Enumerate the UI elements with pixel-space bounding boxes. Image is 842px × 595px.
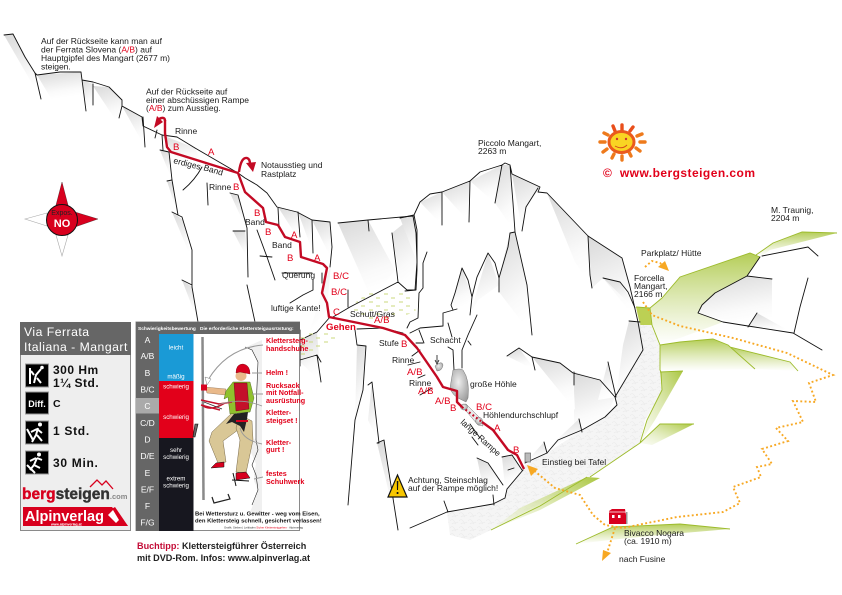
icon: exposure compass: Expos. (51, 210, 73, 217)
icon: climber (26, 364, 48, 387)
difficulty scale column: D (144, 434, 151, 444)
credit line: Grafik: Sieben | Leitfaden Sicher Klettersteiggehen · Alpinverlag (224, 526, 303, 530)
icon: info board (525, 453, 530, 462)
icon: warning triangle (388, 475, 407, 497)
map labels: Forcella (634, 273, 665, 283)
panel headings: Die erforderliche Klettersteigausrüstung: (200, 326, 294, 332)
difficulty scale column: D/E (140, 451, 155, 461)
book tip: Buchtipp: (137, 541, 182, 551)
hiking trails (527, 261, 833, 561)
difficulty colour bands: mäßig (167, 374, 185, 380)
map labels: 2204 m (771, 213, 799, 223)
difficulty colour bands: schwierig (163, 384, 189, 390)
equipment labels: Schuhwerk (266, 477, 304, 486)
icon: exposure compass (25, 182, 98, 256)
difficulty colour bands: leicht (169, 344, 183, 352)
map labels: Höhlendurchschlupf (483, 410, 559, 420)
map labels: Mangart, (634, 281, 668, 291)
difficulty grades: B/C (333, 271, 349, 282)
map labels: erdiges (173, 155, 202, 172)
logo: Alpinverlag: www.alpinverlag.at (50, 522, 82, 526)
map labels: lange Rampe (459, 417, 503, 459)
map labels: 2263 m (478, 146, 506, 156)
map labels: Achtung, Steinschlag (408, 475, 488, 485)
difficulty value: C (53, 398, 61, 410)
difficulty scale column: F (145, 501, 150, 511)
difficulty grades: B/C (331, 287, 347, 298)
map labels: luftige Kante! (271, 303, 321, 313)
equipment labels: Klettersteig- (266, 336, 309, 345)
difficulty grades: A/B (418, 386, 433, 397)
difficulty colour bands: sehr (170, 447, 182, 454)
difficulty scale column: E/F (141, 484, 154, 494)
note: exit ramp: einer abschüssigen Rampe (146, 95, 249, 105)
book tip: mit DVD-Rom. Infos: www.alpinverlag.at (137, 553, 310, 563)
route title: Via Ferrata (24, 325, 90, 339)
rock shading (4, 34, 793, 530)
icon: difficulty: Diff. (28, 399, 46, 409)
difficulty scale column: C/D (140, 418, 155, 428)
map labels (173, 126, 814, 564)
difficulty grades: B (287, 253, 293, 264)
note: exit ramp: (A/B) zum Ausstieg. (146, 103, 221, 113)
icon: sun logo (600, 125, 645, 160)
difficulty scale column: A (145, 335, 151, 345)
map labels: Einstieg bei Tafel (542, 457, 606, 467)
difficulty grades: B (513, 445, 519, 456)
arrow: Schacht pointer (435, 355, 439, 364)
difficulty grades: B (265, 227, 271, 238)
icon: approach (26, 421, 48, 444)
map labels: nach Fusine (619, 554, 666, 564)
equipment labels (266, 336, 309, 486)
scree slope (447, 322, 662, 540)
difficulty colour bands (159, 334, 194, 531)
map labels: Stufe (379, 338, 399, 348)
equipment labels: Helm ! (266, 368, 288, 377)
caves (435, 363, 483, 426)
map labels: (ca. 1910 m) (624, 536, 672, 546)
difficulty grades: B (254, 208, 260, 219)
map labels: Rinne (392, 355, 414, 365)
difficulty scale column: F/G (140, 518, 155, 528)
ascent stats: 1¼ Std. (53, 376, 99, 390)
map labels: Rinne (409, 378, 431, 388)
map labels: Piccolo Mangart, (478, 138, 541, 148)
difficulty grades (173, 142, 519, 456)
icon: difficulty (26, 392, 48, 414)
map labels: Rinne (209, 182, 231, 192)
panel: route summary (20, 322, 131, 530)
descent time: 30 Min. (53, 456, 99, 470)
map labels: M. Traunig, (771, 205, 814, 215)
difficulty grades: A/B (407, 367, 422, 378)
difficulty grades: A (291, 230, 298, 241)
difficulty grades: C (333, 307, 340, 318)
equipment labels: steigset ! (266, 416, 298, 425)
map labels: 2166 m (634, 289, 662, 299)
panel: difficulty and equipment (136, 322, 322, 531)
map labels: Band (272, 240, 292, 250)
grass patches (300, 292, 416, 360)
map labels: Parkplatz/ Hütte (641, 248, 702, 258)
approach time: 1 Std. (53, 424, 90, 438)
logo: bergsteigen: bergsteigen.com (22, 486, 128, 503)
equipment labels: Rucksack (266, 381, 300, 390)
logo: Alpinverlag: Alpinverlag (25, 509, 104, 525)
difficulty scale column: C (144, 401, 151, 411)
difficulty grades: Gehen (326, 322, 356, 333)
equipment labels: festes (266, 469, 287, 478)
difficulty grades: B (173, 142, 179, 153)
green meadows (491, 232, 837, 544)
note: exit ramp: Auf der Rückseite auf (146, 86, 228, 96)
map labels: Band (245, 217, 265, 227)
top note: Ferrata Slovena: steigen. (41, 62, 71, 72)
copyright url: © www.bergsteigen.com (603, 166, 755, 180)
difficulty scale column: A/B (141, 351, 155, 361)
book tip: Klettersteigführer Österreich (182, 541, 306, 551)
difficulty grades: A/B (435, 396, 450, 407)
equipment labels: ausrüstung (266, 396, 305, 405)
equipment labels: gurt ! (266, 445, 284, 454)
map labels: Schutt/Gras (350, 309, 395, 319)
difficulty colour bands: schwierig (163, 454, 189, 461)
difficulty scale column: B (145, 368, 151, 378)
route title: Italiana - Mangart (24, 340, 128, 354)
ascent stats: 300 Hm (53, 363, 99, 377)
difficulty colour bands: schwierig (163, 482, 189, 490)
difficulty scale column: B/C (140, 384, 155, 394)
top note: Ferrata Slovena: Hauptgipfel des Mangart (2677 m) (41, 53, 170, 63)
climber illustration (193, 337, 263, 512)
panel headings: Schwierigkeitsbewertung (138, 326, 196, 332)
logo: Alpinverlag (23, 507, 128, 526)
difficulty colour bands: extrem (167, 476, 185, 482)
map labels: Bivacco Nogara (624, 528, 684, 538)
difficulty grades: A (314, 253, 321, 264)
equipment labels: mit Notfall- (266, 388, 304, 397)
difficulty grades: A/B (374, 315, 389, 326)
icon: exposure compass: NO (54, 218, 71, 230)
icon: hut (609, 509, 628, 524)
difficulty grades: B/C (476, 402, 492, 413)
map labels: auf der Rampe möglich! (408, 483, 498, 493)
difficulty grades: B (450, 403, 456, 414)
top note: Ferrata Slovena: der Ferrata Slovena (A/B) auf (41, 44, 152, 54)
map labels: Rastplatz (261, 169, 296, 179)
map labels: Querung (282, 270, 315, 280)
difficulty grades: A (494, 423, 501, 434)
difficulty grades: B (233, 182, 239, 193)
equipment labels: handschuhe (266, 344, 308, 353)
climbing route (154, 116, 524, 469)
top note: Ferrata Slovena: Auf der Rückseite kann man auf (41, 36, 163, 46)
equipment labels: Kletter- (266, 438, 292, 447)
map labels: Notausstieg und (261, 160, 323, 170)
storm warning note: den Klettersteig schnell, gesichert verlassen! (195, 518, 322, 524)
difficulty grades: A (208, 147, 215, 158)
map labels: Rinne (175, 126, 197, 136)
difficulty grades: B (401, 339, 407, 350)
map labels: große Höhle (470, 379, 517, 389)
map labels: Band (202, 162, 225, 178)
icon: descent (26, 451, 48, 474)
equipment labels: Kletter- (266, 408, 292, 417)
difficulty scale column: E (145, 468, 151, 478)
difficulty scale column (136, 334, 159, 531)
difficulty colour bands: schwierig (163, 414, 189, 421)
map labels: Schacht (430, 335, 461, 345)
storm warning note: Bei Wettersturz u. Gewitter - weg vom Eisen, (195, 512, 320, 518)
